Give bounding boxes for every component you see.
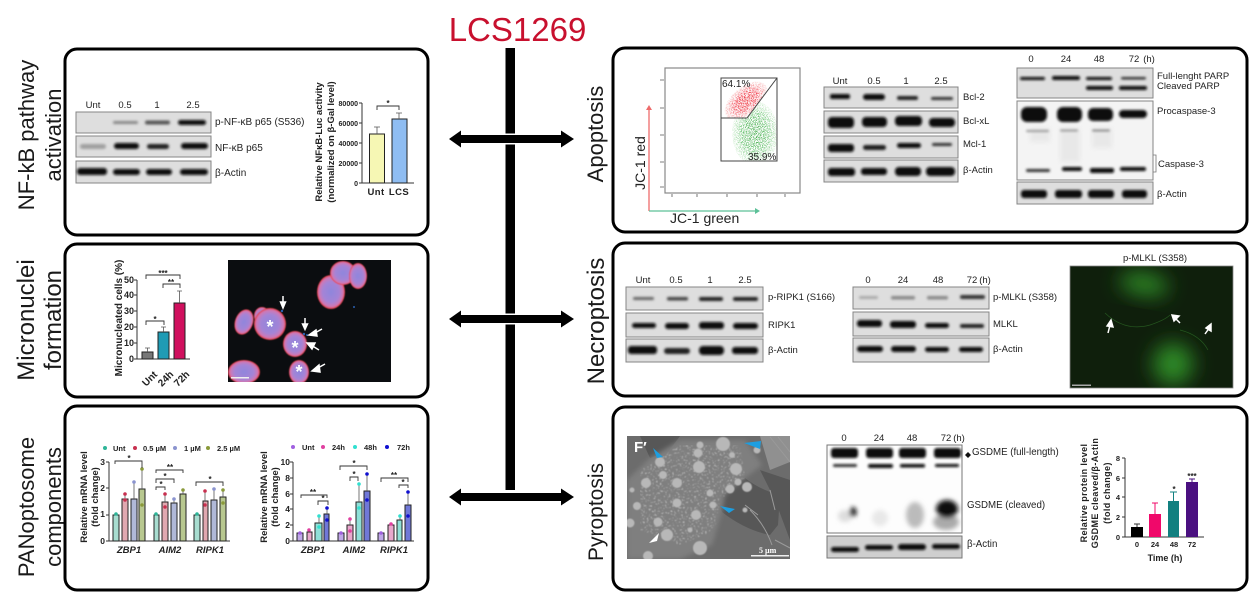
western blot: NF-kB: NF-κB p65 bbox=[215, 143, 263, 154]
western blot: NF-kB: 0.5 bbox=[118, 100, 132, 111]
western blot: MLKL: MLKL bbox=[993, 319, 1018, 330]
grouped bar chart: mRNA by time: * bbox=[352, 459, 356, 468]
grouped bar chart: mRNA by dose: * bbox=[208, 475, 212, 484]
bar chart: NF-kB luciferase: 0 bbox=[354, 181, 358, 188]
bar chart: cleaved GSDME: Time (h) bbox=[1148, 553, 1182, 563]
western blot: PARP and caspase-3: 0 bbox=[1028, 54, 1034, 65]
grouped bar chart: mRNA by time: 6 bbox=[285, 489, 290, 499]
western blot: Bcl-2 family: Mcl-1 bbox=[963, 139, 986, 150]
grouped bar chart: mRNA by dose: 3 bbox=[100, 457, 105, 467]
western blot: RIPK1: β-Actin bbox=[768, 345, 798, 356]
western blot: RIPK1: RIPK1 bbox=[768, 320, 795, 331]
grouped bar chart: mRNA by dose: 1 bbox=[100, 509, 105, 519]
panel: Apoptosis bbox=[613, 48, 1247, 232]
grouped bar chart: mRNA by time: 72h bbox=[397, 443, 410, 452]
panel: Pyroptosis bbox=[613, 407, 1247, 590]
title: LCS1269 bbox=[449, 11, 586, 48]
grouped bar chart: mRNA by dose: ZBP1 bbox=[116, 545, 141, 556]
bar chart: NF-kB luciferase: (normalized on β-Gal level) bbox=[326, 81, 337, 203]
western blot: PARP and caspase-3: 24 bbox=[1061, 54, 1071, 65]
grouped bar chart: mRNA by time: (fold change) bbox=[270, 467, 281, 527]
grouped bar chart: mRNA by dose: Relative mRNA level bbox=[79, 451, 90, 543]
western blot: NF-kB: 1 bbox=[154, 100, 160, 111]
image: p-MLKL fluorescence: p-MLKL (S358) bbox=[1123, 253, 1187, 264]
heading: NF-kB pathway activation: NF-kB pathway bbox=[14, 60, 39, 210]
bar chart: micronucleated cells: 30 bbox=[124, 306, 134, 316]
western blot: GSDME: GSDME (full-length) bbox=[972, 447, 1059, 458]
flow cytometry plot: JC-1 bbox=[632, 68, 800, 226]
heading: Micronuclei formation: Micronuclei bbox=[13, 259, 40, 381]
western blot: MLKL: p-MLKL (S358) bbox=[993, 292, 1057, 303]
bar chart: cleaved GSDME: (fold change) bbox=[1102, 462, 1112, 524]
western blot: PARP and caspase-3: Cleaved PARP bbox=[1157, 81, 1220, 92]
heading: NF-kB pathway activation: activation bbox=[41, 89, 66, 181]
grouped bar chart: mRNA by dose: 2 bbox=[100, 483, 105, 493]
grouped bar chart: mRNA by time: 4 bbox=[285, 504, 290, 514]
bar chart: micronucleated cells: Micronucleated cells (%) bbox=[114, 260, 125, 376]
western blot: RIPK1: p-RIPK1 (S166) bbox=[768, 292, 835, 303]
bar chart: NF-kB luciferase bbox=[314, 81, 414, 203]
grouped bar chart: mRNA by time: 10 bbox=[281, 457, 290, 467]
bar chart: micronucleated cells: 40 bbox=[124, 290, 134, 300]
bar chart: micronucleated cells: Unt bbox=[140, 369, 160, 389]
bar chart: cleaved GSDME: 6 bbox=[1116, 474, 1120, 483]
flow cytometry plot: JC-1: 35.9% bbox=[748, 152, 776, 163]
grouped bar chart: mRNA by time: ** bbox=[391, 471, 398, 480]
western blot: RIPK1 bbox=[626, 275, 835, 362]
image: fluorescence micrograph of micronuclei: * bbox=[291, 338, 299, 358]
panel: NF-kB pathway activation bbox=[65, 49, 428, 235]
western blot: NF-kB: Unt bbox=[86, 100, 101, 111]
bar chart: cleaved GSDME: 48 bbox=[1170, 540, 1178, 549]
western blot: MLKL: 24 bbox=[898, 275, 908, 286]
western blot: RIPK1: 0.5 bbox=[669, 275, 683, 286]
panel: Micronuclei formation bbox=[65, 244, 428, 397]
western blot: GSDME: β-Actin bbox=[967, 539, 997, 550]
bar chart: NF-kB luciferase: 80000 bbox=[339, 101, 358, 108]
image: p-MLKL fluorescence bbox=[1070, 253, 1233, 388]
bar chart: micronucleated cells: 72h bbox=[172, 369, 192, 389]
bar chart: cleaved GSDME: Relative protein level bbox=[1079, 444, 1089, 542]
panel: PANoptosome components bbox=[65, 406, 428, 590]
western blot: Bcl-2 family: 1 bbox=[903, 76, 909, 87]
image: fluorescence micrograph of micronuclei bbox=[228, 260, 391, 384]
bar chart: cleaved GSDME: * bbox=[1172, 485, 1176, 494]
bar chart: micronucleated cells: 50 bbox=[124, 275, 134, 285]
grouped bar chart: mRNA by dose: (fold change) bbox=[90, 467, 101, 527]
grouped bar chart: mRNA by time: 48h bbox=[364, 443, 377, 452]
arrow: micronuclei to necroptosis bbox=[449, 310, 574, 328]
bar chart: cleaved GSDME: 0 bbox=[1116, 533, 1120, 542]
bar chart: micronucleated cells: 24h bbox=[156, 369, 176, 389]
western blot: GSDME: 0 bbox=[841, 433, 847, 444]
heading: Apoptosis: Apoptosis bbox=[583, 86, 608, 182]
western blot: GSDME: 48 bbox=[907, 433, 917, 444]
grouped bar chart: mRNA by dose: 0 bbox=[100, 536, 105, 546]
western blot: MLKL: β-Actin bbox=[993, 344, 1023, 355]
western blot: RIPK1: 2.5 bbox=[738, 275, 752, 286]
western blot: GSDME: (h) bbox=[953, 433, 965, 444]
western blot: GSDME bbox=[827, 433, 1059, 558]
western blot: Bcl-2 family: 2.5 bbox=[934, 76, 948, 87]
western blot: MLKL: 72 bbox=[967, 275, 977, 286]
bar chart: micronucleated cells: 20 bbox=[124, 322, 134, 332]
bar chart: cleaved GSDME: 0 bbox=[1135, 540, 1139, 549]
grouped bar chart: mRNA by time: AIM2 bbox=[342, 545, 366, 556]
grouped bar chart: mRNA by dose: 2.5 µM bbox=[217, 444, 240, 453]
image: fluorescence micrograph of micronuclei: * bbox=[266, 317, 274, 337]
western blot: PARP and caspase-3: (h) bbox=[1143, 54, 1155, 65]
bar chart: micronucleated cells bbox=[114, 260, 192, 389]
grouped bar chart: mRNA by dose bbox=[79, 444, 240, 556]
flow cytometry plot: JC-1: JC-1 green bbox=[670, 210, 739, 226]
arrow: PANoptosome to pyroptosis bbox=[449, 488, 574, 506]
bar chart: NF-kB luciferase: Unt bbox=[367, 187, 385, 198]
heading: PANoptosome components: components bbox=[41, 447, 66, 567]
bar chart: NF-kB luciferase: 40000 bbox=[339, 141, 358, 148]
western blot: PARP and caspase-3: 72 bbox=[1129, 54, 1139, 65]
bar chart: micronucleated cells: ** bbox=[168, 278, 175, 287]
western blot: Bcl-2 family: Unt bbox=[833, 76, 848, 87]
bar chart: NF-kB luciferase: LCS bbox=[389, 187, 409, 198]
bar chart: NF-kB luciferase: 60000 bbox=[339, 121, 358, 128]
western blot: PARP and caspase-3: Caspase-3 bbox=[1158, 159, 1204, 170]
western blot: Bcl-2 family: β-Actin bbox=[963, 165, 993, 176]
image: SEM micrograph bbox=[626, 436, 790, 561]
grouped bar chart: mRNA by time: 24h bbox=[332, 443, 345, 452]
heading: PANoptosome components: PANoptosome bbox=[14, 437, 39, 577]
bar chart: cleaved GSDME: 2 bbox=[1116, 513, 1120, 522]
western blot: RIPK1: Unt bbox=[636, 275, 651, 286]
bar chart: cleaved GSDME: 72 bbox=[1188, 540, 1196, 549]
bar chart: cleaved GSDME: 24 bbox=[1151, 540, 1160, 549]
bar chart: micronucleated cells: 10 bbox=[124, 338, 134, 348]
bar chart: cleaved GSDME: GSDME cleaved/β-Actin bbox=[1090, 438, 1100, 548]
western blot: NF-kB: β-Actin bbox=[215, 168, 246, 179]
grouped bar chart: mRNA by dose: ** bbox=[167, 463, 174, 472]
bar chart: NF-kB luciferase: Relative NFκB-Luc activity bbox=[314, 82, 325, 202]
western blot: PARP and caspase-3: Procaspase-3 bbox=[1157, 106, 1216, 117]
grouped bar chart: mRNA by dose: 1 µM bbox=[184, 444, 201, 453]
western blot: GSDME: GSDME (cleaved) bbox=[967, 500, 1045, 511]
grouped bar chart: mRNA by time: Relative mRNA level bbox=[259, 451, 270, 543]
western blot: GSDME: 72 bbox=[941, 433, 951, 444]
bar chart: NF-kB luciferase: * bbox=[386, 99, 390, 108]
image: SEM micrograph: 5 µm bbox=[759, 546, 777, 555]
grouped bar chart: mRNA by time: ZBP1 bbox=[300, 545, 325, 556]
grouped bar chart: mRNA by dose: 0.5 µM bbox=[143, 444, 166, 453]
western blot: Bcl-2 family: 0.5 bbox=[867, 76, 881, 87]
western blot: PARP and caspase-3: Full-lenght PARP bbox=[1157, 71, 1229, 82]
western blot: Bcl-2 family: Bcl-2 bbox=[963, 92, 985, 103]
grouped bar chart: mRNA by dose: AIM2 bbox=[158, 545, 182, 556]
grouped bar chart: mRNA by time: 0 bbox=[285, 536, 290, 546]
central vertical connector bbox=[506, 48, 515, 490]
grouped bar chart: mRNA by time: * bbox=[352, 470, 356, 479]
western blot: MLKL: 48 bbox=[933, 275, 943, 286]
grouped bar chart: mRNA by dose: * bbox=[127, 454, 131, 463]
bar chart: micronucleated cells: 0 bbox=[129, 354, 134, 364]
western blot: MLKL: (h) bbox=[979, 275, 991, 286]
grouped bar chart: mRNA by dose: Unt bbox=[113, 444, 126, 453]
heading: Pyroptosis: Pyroptosis bbox=[585, 463, 608, 561]
western blot: PARP and caspase-3 bbox=[1017, 54, 1229, 204]
western blot: PARP and caspase-3: 48 bbox=[1094, 54, 1104, 65]
western blot: NF-kB bbox=[76, 100, 304, 183]
image: SEM micrograph: F′ bbox=[634, 439, 647, 456]
western blot: NF-kB: p-NF-κB p65 (S536) bbox=[215, 117, 304, 128]
grouped bar chart: mRNA by dose: * bbox=[163, 472, 167, 481]
western blot: Bcl-2 family: Bcl-xL bbox=[963, 116, 989, 127]
arrow: NF-kB to apoptosis bbox=[449, 130, 574, 148]
grouped bar chart: mRNA by time bbox=[259, 443, 414, 556]
grouped bar chart: mRNA by time: ** bbox=[310, 488, 317, 497]
heading: Necroptosis: Necroptosis bbox=[583, 258, 610, 384]
grouped bar chart: mRNA by time: 2 bbox=[285, 520, 290, 530]
western blot: Bcl-2 family bbox=[824, 76, 993, 182]
image: fluorescence micrograph of micronuclei: * bbox=[295, 362, 303, 382]
bar chart: micronucleated cells: *** bbox=[158, 269, 169, 278]
grouped bar chart: mRNA by time: * bbox=[321, 494, 325, 503]
bar chart: cleaved GSDME: 4 bbox=[1116, 493, 1121, 502]
bar chart: cleaved GSDME bbox=[1079, 438, 1204, 563]
western blot: PARP and caspase-3: β-Actin bbox=[1157, 189, 1187, 200]
heading: Micronuclei formation: formation bbox=[40, 270, 67, 370]
western blot: RIPK1: 1 bbox=[707, 275, 713, 286]
grouped bar chart: mRNA by time: * bbox=[401, 478, 405, 487]
bar chart: micronucleated cells: * bbox=[153, 315, 157, 324]
western blot: MLKL: 0 bbox=[865, 275, 871, 286]
grouped bar chart: mRNA by time: 8 bbox=[285, 473, 290, 483]
western blot: GSDME: 24 bbox=[874, 433, 884, 444]
grouped bar chart: mRNA by dose: * bbox=[159, 480, 163, 489]
flow cytometry plot: JC-1: 64.1% bbox=[722, 79, 750, 90]
western blot: NF-kB: 2.5 bbox=[186, 100, 200, 111]
grouped bar chart: mRNA by dose: RIPK1 bbox=[196, 545, 224, 556]
panel: Necroptosis bbox=[613, 243, 1247, 396]
bar chart: cleaved GSDME: 8 bbox=[1116, 454, 1120, 463]
flow cytometry plot: JC-1: JC-1 red bbox=[632, 136, 648, 190]
grouped bar chart: mRNA by time: RIPK1 bbox=[380, 545, 408, 556]
western blot: MLKL bbox=[853, 275, 1057, 362]
grouped bar chart: mRNA by time: Unt bbox=[302, 443, 315, 452]
bar chart: NF-kB luciferase: 20000 bbox=[339, 161, 358, 168]
bar chart: cleaved GSDME: *** bbox=[1187, 472, 1198, 481]
